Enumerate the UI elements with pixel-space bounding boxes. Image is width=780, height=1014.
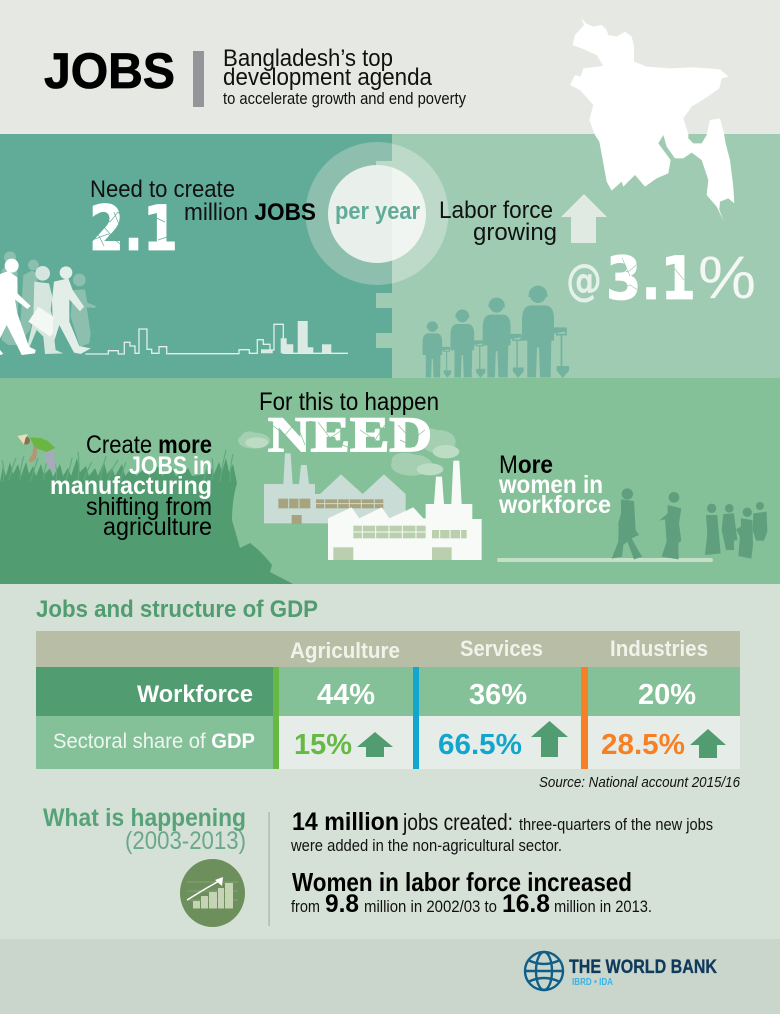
text: women in labor force: from	[291, 897, 320, 916]
puzzle tabs	[376, 293, 392, 348]
text: more women in workforce	[498, 451, 611, 519]
arrow: up	[561, 194, 607, 243]
panel: need	[0, 378, 780, 584]
heading: for this to happen: For this to happen	[259, 388, 439, 416]
row: workforce: Workforce	[137, 681, 253, 708]
number: 3.1 percent: 3.1	[606, 244, 696, 314]
text: create more jobs: Create more	[86, 431, 212, 459]
source note: Source: National account 2015/16	[539, 774, 741, 791]
per year badge: per year	[335, 198, 420, 225]
title divider	[193, 51, 204, 107]
text: women in labor force: 16.8	[502, 890, 550, 918]
column stripes	[273, 667, 588, 769]
subtitle: development agenda	[223, 64, 433, 91]
illustration: Bangladesh map	[570, 18, 734, 222]
text: 14 million jobs: jobs created:	[402, 809, 513, 835]
row: sectoral share of GDP	[36, 716, 740, 769]
icon: growth chart	[180, 859, 245, 927]
text: create more jobs: shifting from	[86, 493, 212, 521]
number: 3.1 percent	[566, 244, 756, 314]
text: 14 million jobs	[290, 808, 713, 855]
text: 14 million jobs: three-quarters of the new jobs	[519, 815, 713, 834]
text: women in labor force: 9.8	[325, 890, 359, 918]
subtitle	[223, 45, 466, 108]
row: workforce: 20%	[638, 679, 696, 711]
icon: women walking	[612, 488, 767, 559]
text: labor force growing: growing	[473, 219, 557, 246]
text: 14 million jobs: 14 million	[292, 808, 399, 836]
number: 3.1 percent: %	[698, 244, 756, 311]
text: create more jobs: manufacturing	[50, 472, 212, 500]
row: sectoral share of GDP: 15%	[294, 729, 352, 761]
number: 3.1 percent: @	[566, 255, 602, 306]
table header: Industries	[610, 636, 708, 661]
chart: skyline outline	[85, 321, 348, 354]
row: sectoral share of GDP: 28.5%	[601, 729, 685, 761]
row: sectoral share of GDP: 66.5%	[438, 729, 522, 761]
text: 14 million jobs: were added in the non-agricultural sector.	[290, 836, 562, 855]
text: women in labor force: million in 2013.	[554, 897, 652, 916]
arrows: GDP increase	[357, 721, 726, 758]
title: JOBS	[44, 43, 175, 99]
text: need: NEED	[268, 406, 432, 462]
icon: workers with shovels	[423, 286, 569, 378]
text: million jobs: million JOBS	[184, 199, 316, 226]
text: labor force growing: Labor force	[439, 197, 553, 224]
panel: header	[0, 0, 780, 134]
heading: what is happening	[43, 804, 246, 855]
icon: globe	[525, 952, 563, 990]
heading: jobs and structure of GDP: Jobs and structure of GDP	[36, 596, 318, 623]
icon: walking people	[0, 251, 96, 355]
table header: Agriculture	[290, 638, 400, 663]
panel: what is happening	[43, 804, 713, 927]
heading: what is happening: What is happening	[43, 804, 246, 832]
row: workforce: 44%	[317, 679, 375, 711]
table header	[36, 631, 740, 667]
illustration: back factory	[264, 453, 406, 524]
text: women in labor force: million in 2002/03 to	[364, 897, 497, 916]
text: create more jobs: agriculture	[103, 513, 212, 541]
number: 2.1: 2.1	[89, 192, 178, 265]
per year badge	[306, 142, 448, 285]
divider	[268, 812, 270, 926]
text: women in labor force	[291, 867, 652, 918]
text: create more jobs	[50, 431, 212, 541]
row: workforce	[36, 667, 740, 716]
illustration: front factory	[328, 461, 482, 560]
table: jobs and GDP	[36, 631, 740, 769]
text: create more jobs: JOBS in	[129, 452, 212, 480]
icon: farmer	[17, 434, 56, 471]
footer	[0, 939, 780, 1014]
illustration: grass hill	[0, 450, 293, 584]
text: labor force growing	[439, 197, 557, 246]
text: women in labor force: Women in labor force increased	[292, 867, 632, 897]
logo: world bank	[525, 952, 717, 990]
panel: jobs per year	[0, 134, 780, 378]
illustration: smoke	[238, 428, 459, 476]
text: more women in workforce: women in	[498, 471, 603, 499]
text: more women in workforce: workforce	[498, 491, 611, 519]
row: workforce: 36%	[469, 679, 527, 711]
text: IBRD IDA: IBRD • IDA	[572, 977, 613, 988]
text: the world bank: THE WORLD BANK	[569, 957, 717, 978]
subtitle: to accelerate growth and end poverty	[223, 89, 466, 108]
subtitle: Bangladesh’s top	[223, 45, 393, 72]
row: sectoral share of GDP: Sectoral share of GDP	[53, 730, 255, 753]
text: need to create: Need to create	[90, 176, 235, 203]
heading: what is happening: (2003-2013)	[125, 827, 246, 855]
text: more women in workforce: More	[499, 451, 553, 479]
table header: Services	[460, 636, 543, 661]
ground line	[497, 558, 713, 562]
